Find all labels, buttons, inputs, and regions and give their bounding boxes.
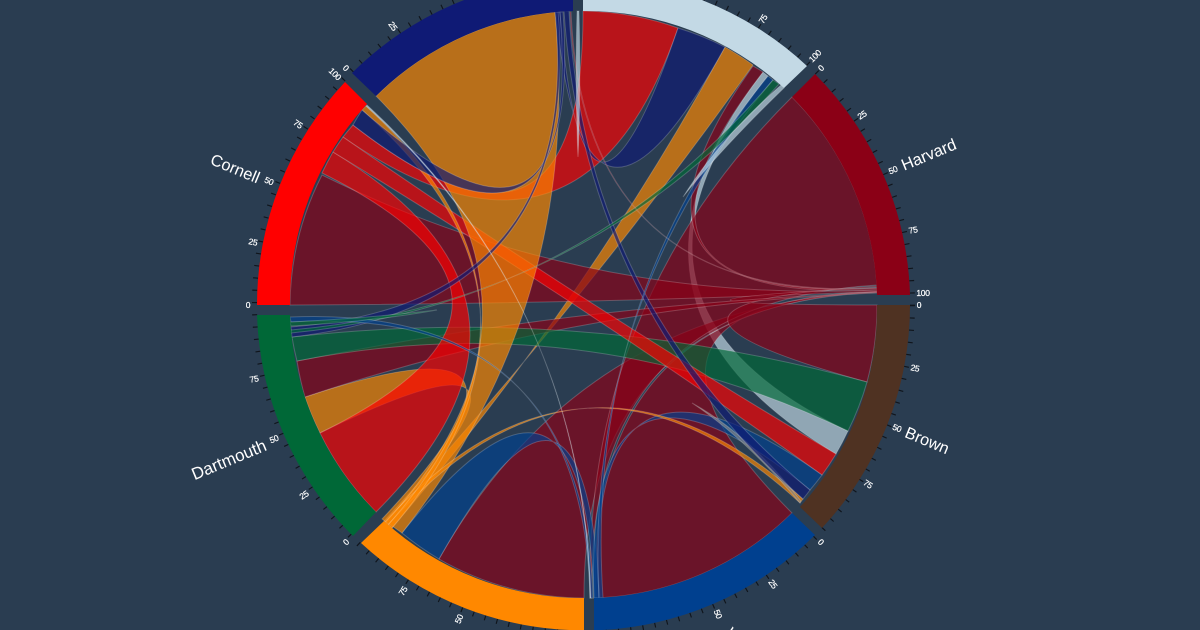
tick value labels: 25 xyxy=(298,488,311,502)
tick value labels: 50 xyxy=(887,163,900,176)
segment: Princeton xyxy=(361,521,584,630)
chord: Brown to Penn light blue xyxy=(688,72,848,454)
segment: Cornell xyxy=(257,82,367,305)
chord: Dartmouth to Cornell xyxy=(320,152,470,512)
tick value labels: 25 xyxy=(910,362,921,374)
chord: Penn self light tip xyxy=(683,85,784,197)
tick value labels: 50 xyxy=(263,175,276,188)
tick value labels: 0 xyxy=(246,300,251,310)
chord: Dartmouth self green tip xyxy=(290,310,437,326)
segment: Penn xyxy=(583,0,807,88)
tick value labels: 50 xyxy=(453,612,466,625)
chord: Cornell to Columbia navy xyxy=(353,12,565,193)
segment: Columbia xyxy=(352,0,573,96)
chord: Harvard to Yale wide xyxy=(590,97,877,598)
chord: Brown to Columbia navy xyxy=(564,11,810,499)
chord: Cornell to Princeton thin orange xyxy=(362,106,481,528)
segment name labels: Cornell xyxy=(208,151,262,187)
chord: Columbia self thin tip xyxy=(576,11,580,157)
tick value labels xyxy=(246,12,930,625)
tick value labels: 25 xyxy=(386,20,400,33)
tick value labels: 50 xyxy=(712,608,725,621)
tick value labels: 25 xyxy=(248,236,259,248)
chord: Penn to Cornell xyxy=(343,11,678,200)
tick value labels: 75 xyxy=(862,477,875,491)
chord: Brown to Princeton thin orange xyxy=(385,408,803,525)
segment name labels: Dartmouth xyxy=(189,436,269,484)
tick value labels: 25 xyxy=(766,578,780,591)
chord: Cornell to Harvard xyxy=(290,175,877,305)
ring segments xyxy=(257,0,910,630)
chord: Yale to Harvard xyxy=(595,291,877,598)
tick value labels: 75 xyxy=(756,12,770,25)
tick value labels: 75 xyxy=(396,584,410,597)
chord: Columbia to Harvard thin line xyxy=(570,12,877,289)
tick value labels: 100 xyxy=(807,47,824,64)
chord: Penn to Harvard xyxy=(691,66,877,291)
tick value labels: 75 xyxy=(292,117,305,131)
tick value labels: 75 xyxy=(249,373,260,385)
chord: Dartmouth to Yale blue xyxy=(290,316,593,598)
tick value labels: 50 xyxy=(891,422,904,435)
segment name labels xyxy=(189,136,959,630)
chord: Penn to Princeton orange xyxy=(384,47,753,528)
chord: Dartmouth to Columbia navy xyxy=(291,12,560,337)
chord: Dartmouth to Princeton orange xyxy=(305,369,471,522)
chord: Dartmouth to Harvard xyxy=(297,292,877,397)
chord: Penn to Columbia navy xyxy=(556,12,725,167)
chord: Brown to Dartmouth green xyxy=(292,327,867,431)
tick value labels: 25 xyxy=(856,108,869,122)
segment: Brown xyxy=(800,305,910,528)
chord: Brown to Harvard xyxy=(728,286,877,382)
tick value labels: 0 xyxy=(341,536,352,547)
tick value labels: 0 xyxy=(341,63,352,74)
chord: Cornell to Yale thin line xyxy=(366,105,591,598)
tick value labels: 0 xyxy=(816,62,827,73)
chord: Yale to Princeton blue xyxy=(402,433,600,598)
tick value labels: 100 xyxy=(916,288,930,298)
chord: Brown self grey tip xyxy=(692,403,801,503)
tick value labels: 0 xyxy=(816,537,827,548)
chords xyxy=(290,11,877,598)
tick value labels: 0 xyxy=(917,300,922,310)
chord: Cornell to Brown xyxy=(333,137,836,475)
tick value labels: 50 xyxy=(268,432,281,445)
chord: Penn to Dartmouth green xyxy=(291,80,779,333)
chord: Princeton to Harvard xyxy=(439,292,877,598)
chord: Columbia to Princeton orange xyxy=(376,12,559,533)
segment name labels: Brown xyxy=(902,424,952,458)
tick marks xyxy=(253,0,914,630)
tick value labels: 75 xyxy=(908,224,919,236)
segment: Harvard xyxy=(792,74,910,295)
segment name labels: Harvard xyxy=(899,136,959,174)
segment: Yale xyxy=(594,513,815,630)
tick value labels: 100 xyxy=(327,66,344,83)
chord: Penn to Yale blue xyxy=(598,76,773,598)
segment: Dartmouth xyxy=(257,315,376,536)
chord: Brown to Yale blue xyxy=(594,412,822,598)
